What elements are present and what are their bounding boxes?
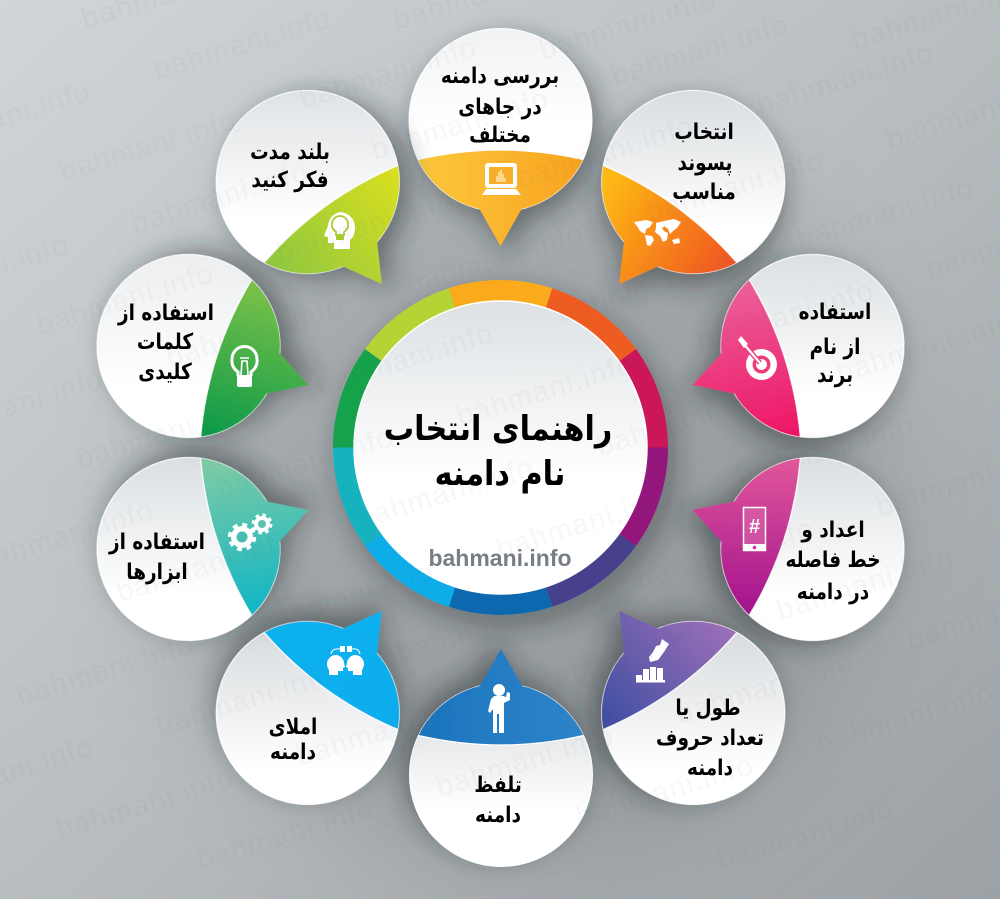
text: املای [269, 713, 317, 739]
watermark: bahmani.info [633, 512, 818, 597]
text: دامنه [270, 738, 316, 764]
icon: world map [634, 219, 681, 246]
watermark: bahmani.info [253, 555, 438, 640]
text: استفاده [799, 298, 871, 324]
text: دامنه [687, 754, 733, 780]
watermark: bahmani.info [513, 110, 698, 195]
title: راهنمای انتخاب [384, 408, 612, 448]
watermark: bahmani.info [673, 646, 858, 731]
watermark: bahmani.info [773, 542, 958, 627]
bubble shape [180, 54, 456, 338]
watermark: bahmani.info [150, 2, 335, 87]
bubble: think long term [180, 54, 456, 338]
text [269, 713, 317, 764]
icon: hand and bar chart [636, 639, 669, 682]
bubble shape [180, 557, 456, 841]
watermark: bahmani.info [296, 31, 481, 116]
icon: phone with hash [743, 508, 766, 551]
watermark: bahmani.info [608, 8, 793, 93]
text [799, 298, 871, 387]
watermark: bahmani.info [403, 217, 588, 302]
text [117, 299, 214, 384]
bubble: length of name [545, 557, 821, 841]
watermark: bahmani.info [393, 585, 578, 670]
icon: head with bulb [324, 212, 355, 249]
bubble shape [545, 54, 821, 338]
text: از نام [810, 333, 860, 359]
text [785, 516, 881, 604]
watermark: bahmani.info [573, 749, 758, 834]
text: اعداد و [800, 516, 865, 542]
watermark: bahmani.info [693, 274, 878, 359]
watermark: bahmani.info [368, 82, 553, 167]
bubble shape [409, 28, 592, 246]
watermark: bahmani.info [193, 792, 378, 877]
text: طول یا [675, 694, 741, 720]
bubble: pronunciation [410, 649, 592, 866]
bubble: keywords [73, 231, 337, 472]
text: استفاده از [117, 299, 214, 325]
watermark: bahmani.info [533, 615, 718, 700]
icon: light bulb [232, 346, 257, 387]
icon: gears [230, 515, 271, 550]
bubble: spelling [180, 557, 456, 841]
text [441, 62, 559, 147]
bubble shape [73, 423, 337, 664]
watermark: bahmani.info [56, 104, 241, 189]
bubble shape [410, 649, 592, 866]
watermark: bahmani.info [53, 762, 238, 847]
watermark: bahmani.info [293, 688, 478, 773]
icon: two heads with plug [327, 646, 364, 675]
subtitle: نام دامنه [435, 453, 565, 493]
text: دامنه [475, 801, 521, 827]
watermark: bahmani.info [643, 144, 828, 229]
watermark: bahmani.info [733, 408, 918, 493]
watermark: bahmani.info [273, 184, 458, 269]
text [672, 118, 736, 204]
watermark: bahmani.info [13, 628, 198, 713]
text: کلمات [137, 328, 193, 354]
watermark: bahmani.info [793, 171, 978, 256]
watermark: bahmani.info [153, 658, 338, 743]
watermark: bahmani.info [453, 348, 638, 433]
bubble shape [73, 231, 337, 472]
watermark: bahmani.info [353, 451, 538, 536]
watermark: bahmani.info [593, 378, 778, 463]
icon: target [738, 336, 777, 380]
icon: phone with hash: # [749, 516, 760, 538]
watermark: bahmani.info [493, 481, 678, 566]
bubble shape [545, 557, 821, 841]
bubble shape [664, 423, 928, 664]
text [108, 528, 205, 584]
watermark: bahmani.info [213, 421, 398, 506]
text [474, 771, 522, 827]
central hub [344, 290, 658, 604]
text: پسوند [678, 149, 732, 176]
icon: person speaking [488, 684, 510, 733]
text [250, 138, 330, 192]
text: تلفظ [474, 771, 522, 797]
bubble: suitable extension [545, 54, 821, 338]
text: در دامنه [797, 578, 869, 604]
bubble: using tools [73, 423, 337, 664]
site name: bahmani.info [428, 545, 572, 571]
text: تعداد حروف [656, 724, 764, 750]
watermark: bahmani.info [713, 792, 898, 877]
text: مناسب [672, 178, 736, 204]
icon: computer [482, 163, 521, 195]
watermark: bahmani.info [813, 676, 998, 761]
bubble: digits and hyphen [664, 423, 928, 664]
text: انتخاب [674, 118, 734, 144]
text: فکر کنید [251, 166, 329, 192]
text: در جاهای [458, 93, 542, 119]
text: کلیدی [138, 358, 192, 384]
watermark: bahmani.info [753, 37, 938, 122]
text: استفاده از [108, 528, 205, 554]
bubble: review in different places [409, 28, 592, 246]
text: بلند مدت [250, 138, 330, 164]
text [656, 694, 764, 780]
text: بررسی دامنه [441, 62, 559, 88]
colour ring [344, 290, 658, 604]
watermark: bahmani.info [33, 257, 218, 342]
watermark: bahmani.info [113, 524, 298, 609]
watermark: bahmani.info [128, 155, 313, 240]
watermark: bahmani.info [313, 317, 498, 402]
text: خط فاصله [785, 546, 881, 572]
watermark: bahmani.info [433, 719, 618, 804]
central white disc [354, 301, 647, 594]
watermark: bahmani.info [73, 391, 258, 476]
text: ابزارها [126, 558, 188, 584]
text: مختلف [469, 121, 531, 147]
text: برند [817, 361, 853, 387]
watermark: bahmani.info [163, 290, 348, 375]
watermark: bahmani.info [553, 244, 738, 329]
bubble: brand name [664, 231, 928, 472]
bubble shape [664, 231, 928, 472]
